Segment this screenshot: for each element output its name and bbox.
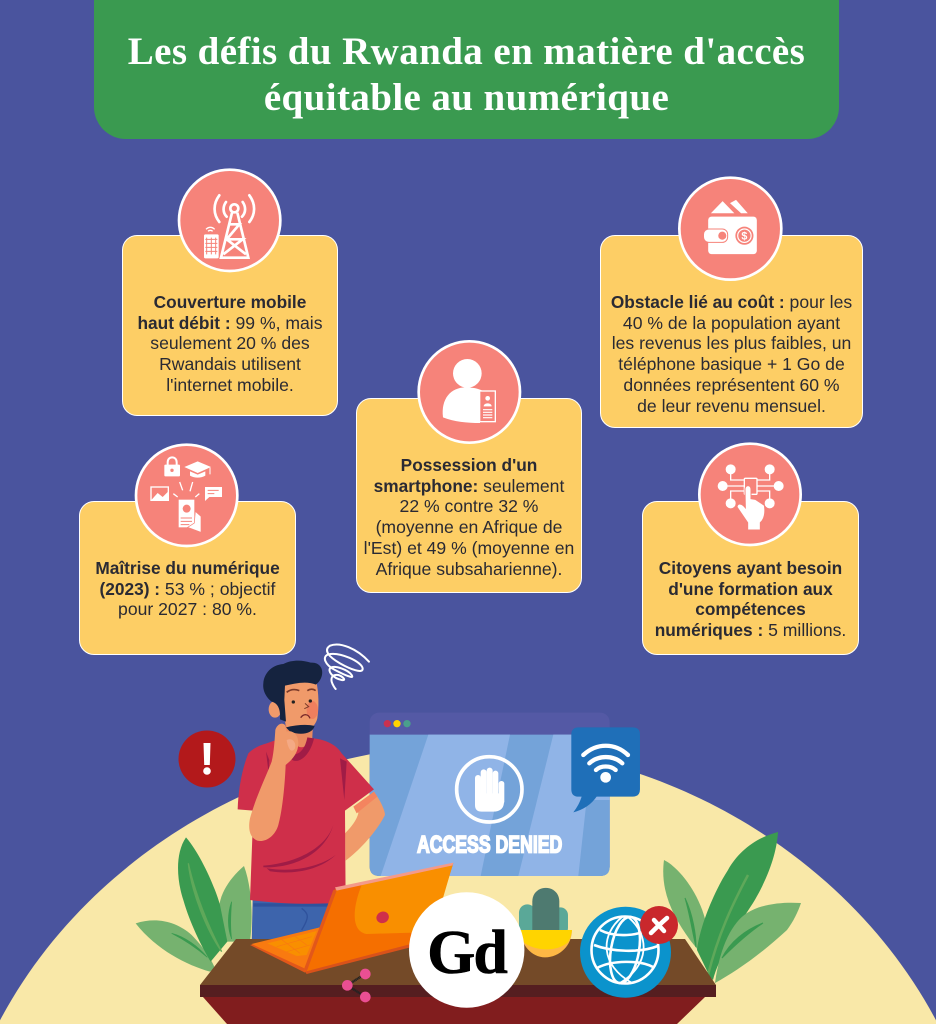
jeans bbox=[252, 898, 329, 943]
text: maîtrise du numérique: (2023) : 53 % ; objectif bbox=[100, 579, 275, 599]
icon: wallet bbox=[678, 176, 783, 281]
text: formation compétences: d'une formation aux bbox=[668, 579, 833, 599]
front arm bbox=[249, 724, 298, 841]
text: formation compétences: compétences bbox=[695, 599, 806, 619]
text: obstacle coût: téléphone basique + 1 Go de bbox=[618, 354, 845, 374]
neck bbox=[285, 717, 313, 750]
text: maîtrise du numérique bbox=[95, 558, 280, 619]
panel: maîtrise du numérique bbox=[79, 443, 296, 655]
logo: Gd bbox=[409, 892, 524, 1008]
panel: couverture mobile bbox=[122, 168, 338, 416]
person thinking bbox=[238, 661, 385, 943]
text: possession smartphone bbox=[364, 455, 574, 579]
hill background bbox=[0, 745, 936, 1024]
panel: possession smartphone bbox=[356, 340, 582, 593]
icon: stop hand bbox=[475, 768, 504, 812]
label: access denied: ACCESS DENIED bbox=[417, 832, 562, 859]
icon: digital skills bbox=[134, 443, 239, 548]
text: possession smartphone: l'Est) et 49 % (moyenne en bbox=[364, 538, 574, 558]
text: obstacle coût: données représentent 60 % bbox=[623, 375, 840, 395]
table bbox=[200, 939, 716, 1024]
text: couverture mobile bbox=[137, 292, 323, 395]
browser window: access denied bbox=[370, 713, 640, 876]
ear bbox=[269, 701, 281, 718]
back arm bbox=[345, 792, 385, 861]
icon: exclamation bbox=[178, 730, 236, 788]
text: obstacle coût: les revenus les plus faibles, un bbox=[612, 333, 851, 353]
text: couverture mobile: l'internet mobile. bbox=[166, 375, 294, 395]
title: Les défis du Rwanda en matière d'accès bbox=[128, 30, 805, 73]
icon: left plant bbox=[136, 837, 252, 972]
icon: right plant bbox=[663, 832, 801, 983]
text: couverture mobile: Couverture mobile bbox=[154, 292, 306, 312]
icon: confusion scribble bbox=[325, 645, 369, 689]
face bbox=[284, 679, 318, 733]
text: maîtrise du numérique: pour 2027 : 80 %. bbox=[118, 599, 257, 619]
text: obstacle coût: Obstacle lié au coût : pour les bbox=[611, 292, 852, 312]
hair bbox=[263, 661, 322, 722]
icon: globe bbox=[580, 907, 671, 998]
shirt folds bbox=[263, 825, 333, 867]
card background bbox=[356, 398, 582, 593]
text: formation compétences: numériques : 5 millions. bbox=[655, 620, 846, 640]
shirt bbox=[238, 738, 374, 904]
icon: wifi bubble bbox=[571, 727, 640, 812]
panel: obstacle coût bbox=[600, 176, 863, 428]
title banner bbox=[94, 0, 839, 139]
laptop bbox=[250, 863, 453, 974]
text: formation compétences bbox=[655, 558, 846, 640]
text: couverture mobile: Rwandais utilisent bbox=[159, 354, 301, 374]
card background bbox=[642, 501, 859, 655]
text: couverture mobile: seulement 20 % des bbox=[150, 333, 310, 353]
brows and eyes bbox=[287, 689, 316, 692]
icon: error badge bbox=[640, 906, 678, 944]
text: possession smartphone: Possession d'un bbox=[401, 455, 537, 475]
icon: person with phone bbox=[417, 340, 522, 444]
card background bbox=[79, 501, 296, 655]
icon: molecule bbox=[342, 969, 371, 1002]
text: possession smartphone: smartphone: seulement bbox=[374, 476, 564, 496]
text: maîtrise du numérique: Maîtrise du numérique bbox=[95, 558, 280, 578]
icon: cactus pot bbox=[519, 888, 572, 957]
text: obstacle coût: de leur revenu mensuel. bbox=[637, 396, 826, 416]
logo: Gd: Gd bbox=[427, 919, 507, 987]
card background bbox=[600, 235, 863, 428]
card background bbox=[122, 235, 338, 416]
icon: antenna tower bbox=[178, 168, 282, 272]
title: équitable au numérique bbox=[264, 76, 669, 119]
icon: touch network bbox=[698, 442, 802, 546]
text: possession smartphone: (moyenne en Afrique de bbox=[376, 517, 562, 537]
title bbox=[128, 30, 805, 119]
text: couverture mobile: haut débit : 99 %, mais bbox=[137, 313, 323, 333]
beard bbox=[286, 725, 315, 734]
text: obstacle coût bbox=[611, 292, 852, 416]
collar bbox=[289, 737, 314, 761]
text: formation compétences: Citoyens ayant besoin bbox=[659, 558, 842, 578]
text: possession smartphone: 22 % contre 32 % bbox=[400, 496, 538, 516]
text: possession smartphone: Afrique subsaharienne). bbox=[376, 559, 562, 579]
panel: formation compétences bbox=[642, 442, 859, 655]
icon: wallet: $ bbox=[741, 231, 747, 243]
text: obstacle coût: 40 % de la population ayant bbox=[623, 313, 840, 333]
